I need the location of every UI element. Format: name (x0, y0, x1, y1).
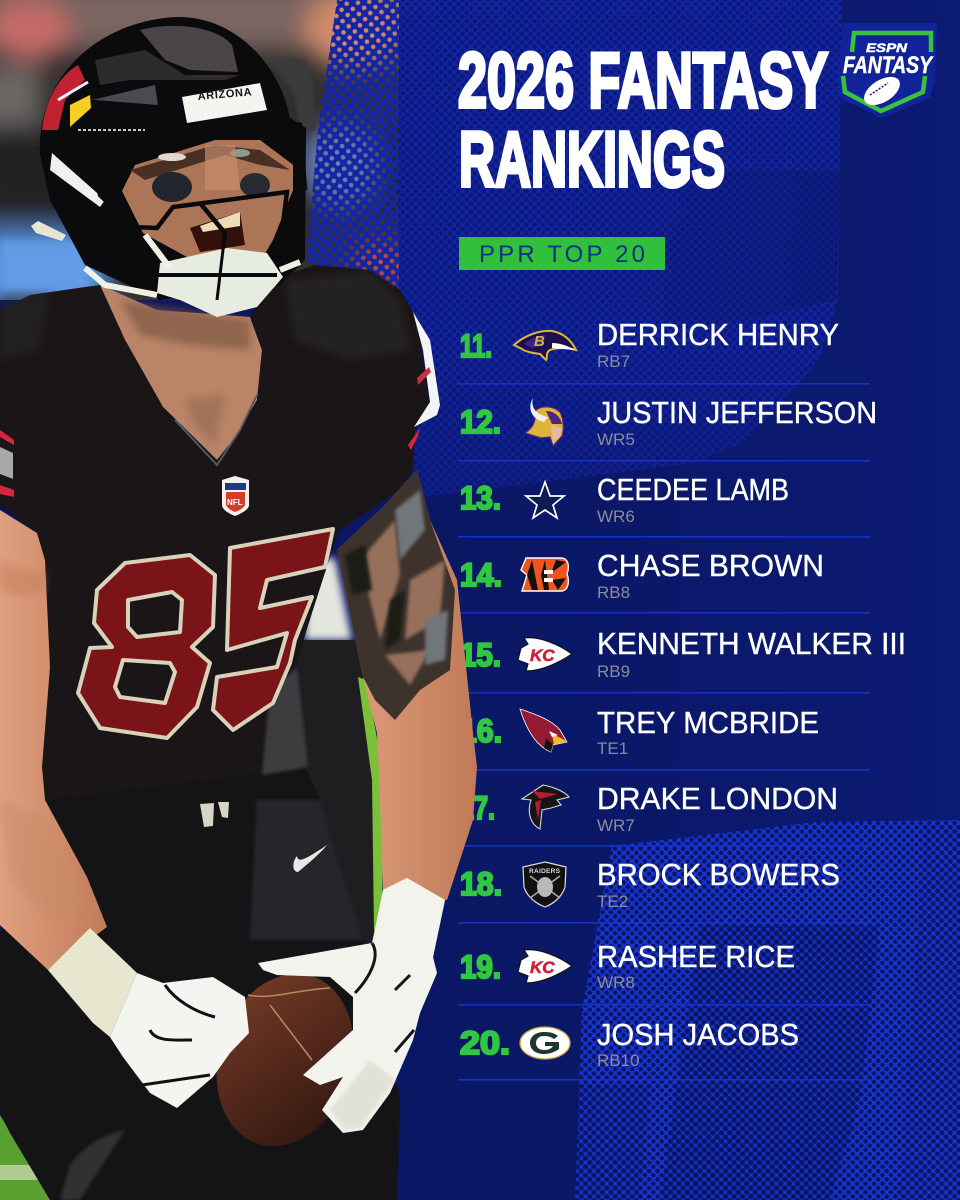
player: right arm (337, 470, 477, 900)
row 12: Justin Jefferson: 12. (460, 404, 501, 440)
background: lower bright halftone block (575, 820, 960, 1200)
player: white helmet stripe (50, 153, 105, 207)
row 17: Drake London: 17. (460, 790, 495, 826)
player: right glove (258, 878, 445, 1133)
player: neck (100, 285, 262, 460)
row 13: CeeDee Lamb (460, 472, 789, 526)
row 11: Derrick Henry (460, 317, 839, 371)
row 18: Brock Bowers (460, 857, 840, 911)
player: facemask (97, 125, 305, 300)
badge: PPR top 20: PPR TOP 20 (479, 241, 645, 268)
player: helmet clip (31, 221, 66, 241)
row 18: Brock Bowers: TE2 (597, 892, 628, 911)
icon: NFL shield (222, 476, 249, 516)
icon: NFL shield: NFL (227, 498, 243, 507)
player: chin cup (157, 248, 283, 317)
icon: Chiefs (518, 638, 572, 671)
player: football (195, 956, 375, 1164)
row 18: Brock Bowers: 18. (460, 866, 502, 902)
photo: background figure (270, 60, 383, 950)
row 17: Drake London: DRAKE LONDON (597, 781, 838, 816)
icon: Ravens (514, 331, 576, 360)
player: left glove (110, 973, 249, 1108)
row 15: Kenneth Walker III: 15. (460, 637, 501, 673)
player (0, 17, 477, 1200)
icon: Raiders (523, 862, 566, 907)
icon: Falcons (522, 785, 569, 829)
row 12: Justin Jefferson (460, 395, 877, 449)
player: left wrist tape (48, 928, 137, 1037)
row 15: Kenneth Walker III: KENNETH WALKER III (597, 626, 906, 661)
row 14: Chase Brown: 14. (460, 557, 502, 593)
row 16: Trey McBride (460, 705, 819, 758)
row 16: Trey McBride: 16. (460, 713, 502, 749)
player: pants (0, 765, 400, 1200)
icon: Vikings (525, 398, 563, 446)
icon: Chiefs: KC (530, 958, 555, 977)
photo: field grass corner (0, 1115, 50, 1200)
player: wrist tape right (372, 878, 445, 957)
row 19: Rashee Rice: RASHEE RICE (597, 939, 795, 974)
player: ARIZONA bumper (182, 83, 267, 123)
row 17: Drake London (460, 781, 838, 835)
row 11: Derrick Henry: 11. (460, 328, 492, 364)
row 15: Kenneth Walker III (460, 626, 906, 681)
badge: PPR top 20 (459, 237, 665, 270)
row 13: CeeDee Lamb: WR6 (597, 507, 635, 526)
row 12: Justin Jefferson: JUSTIN JEFFERSON (597, 395, 877, 430)
ESPN Fantasy logo: FANTASY (843, 52, 934, 79)
icon: Raiders: RAIDERS (529, 868, 561, 875)
player: jersey number 85 (78, 529, 333, 738)
icon: Packers (520, 1027, 570, 1059)
row 12: Justin Jefferson: WR5 (597, 430, 635, 449)
row 15: Kenneth Walker III: RB9 (597, 662, 630, 681)
player: jersey (0, 265, 430, 800)
row 19: Rashee Rice: WR8 (597, 973, 635, 992)
icon: Ravens: B (534, 333, 545, 350)
icon: Chiefs (518, 950, 572, 983)
player: left arm (0, 510, 107, 970)
ESPN Fantasy logo (838, 23, 937, 118)
row 20: Josh Jacobs (460, 1017, 799, 1070)
background photo: blurred stadium crowd (0, 0, 420, 308)
row 17: Drake London: WR7 (597, 816, 635, 835)
background: upper blue halftone block (398, 0, 842, 500)
row 14: Chase Brown: CHASE BROWN (597, 548, 824, 583)
icon: Chiefs: KC (530, 646, 555, 665)
rankings list dividers (458, 383, 870, 1081)
title (458, 36, 828, 203)
row 11: Derrick Henry: RB7 (597, 352, 630, 371)
title: RANKINGS (459, 115, 725, 203)
player: helmet (31, 17, 306, 317)
player: helmet Cardinals decal (42, 65, 91, 130)
player: face (115, 122, 300, 257)
icon: Cowboys star (526, 482, 564, 518)
icon: Nike swoosh (293, 845, 327, 872)
player: tattoo (337, 470, 455, 720)
row 11: Derrick Henry: DERRICK HENRY (597, 317, 839, 352)
row 20: Josh Jacobs: JOSH JACOBS (597, 1017, 799, 1052)
row 20: Josh Jacobs: RB10 (597, 1051, 640, 1070)
row 16: Trey McBride: TREY MCBRIDE (597, 705, 819, 740)
icon: Bengals (521, 558, 568, 591)
row 14: Chase Brown: RB8 (597, 583, 630, 602)
player: drawstring (200, 802, 229, 827)
ESPN Fantasy logo: ESPN (866, 43, 908, 55)
row 20: Josh Jacobs: 20. (460, 1025, 510, 1061)
row 18: Brock Bowers: BROCK BOWERS (597, 857, 840, 892)
icon: Cardinals (520, 709, 567, 752)
player: sleeve stripes (0, 312, 440, 497)
row 13: CeeDee Lamb: 13. (460, 480, 501, 516)
background: blue halftone edge over photo (306, 0, 399, 290)
row 19: Rashee Rice (460, 939, 795, 992)
player: ARIZONA bumper: ARIZONA (197, 86, 252, 103)
row 14: Chase Brown (460, 548, 824, 602)
row 16: Trey McBride: TE1 (597, 739, 628, 758)
row 13: CeeDee Lamb: CEEDEE LAMB (597, 472, 789, 507)
row 19: Rashee Rice: 19. (460, 949, 501, 985)
